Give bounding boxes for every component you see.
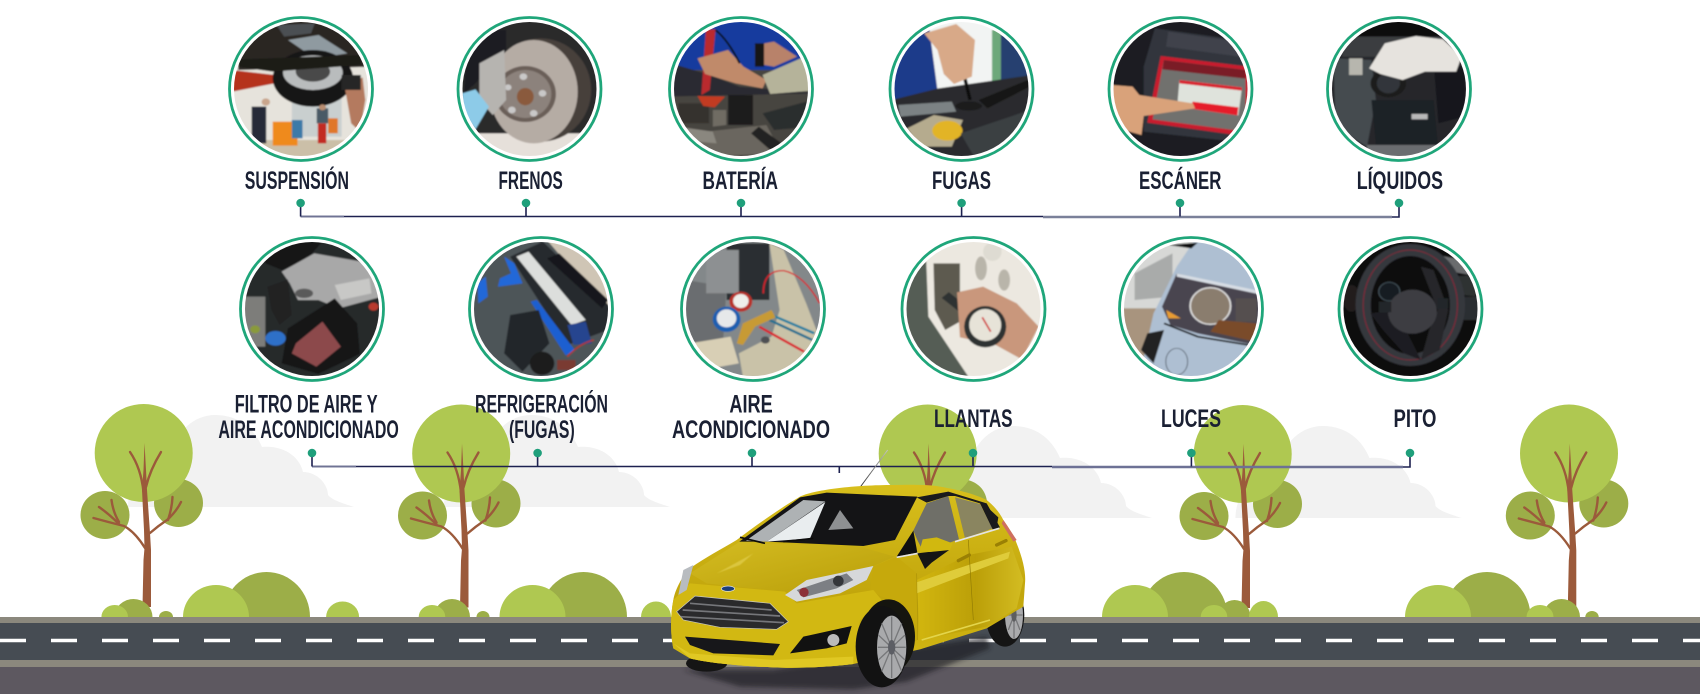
- photo: AC gauges: [686, 242, 820, 376]
- ring: [1339, 238, 1482, 380]
- left headlight: [678, 565, 693, 595]
- photo: dipstick: [894, 22, 1028, 156]
- item: escaner: [1108, 13, 1255, 207]
- ford badge: [721, 586, 735, 591]
- ring: [682, 238, 824, 380]
- photo: steering wheel: [1344, 242, 1478, 376]
- label: FUGAS: [932, 167, 991, 195]
- marker: [969, 449, 977, 457]
- item: pito: [1337, 233, 1488, 457]
- marker: [1395, 199, 1403, 207]
- hood: [690, 542, 895, 592]
- label: LUCES: [1161, 405, 1221, 433]
- item: aire acondicionado: [672, 233, 830, 457]
- label: FILTRO DE AIRE Y: [235, 390, 378, 418]
- photo: headlight: [1124, 242, 1258, 376]
- label: PITO: [1394, 405, 1436, 433]
- item: llantas: [899, 233, 1050, 457]
- ring: [1120, 238, 1262, 380]
- label: SUSPENSIÓN: [245, 165, 349, 195]
- label line 2: ACONDICIONADO: [672, 416, 830, 444]
- grille: [677, 596, 788, 629]
- near-side tyre: [686, 655, 727, 672]
- bumper: [671, 583, 882, 668]
- photo: fluid refill: [1332, 22, 1466, 156]
- photo: tire gauge: [906, 242, 1040, 376]
- marker: [1406, 449, 1414, 457]
- label: FRENOS: [498, 167, 563, 195]
- road: [0, 617, 1700, 694]
- connector line: top row: [301, 203, 1399, 217]
- photo: suspension lift: [234, 22, 368, 156]
- connector line: bottom row: [312, 453, 1410, 473]
- item: frenos: [453, 13, 606, 207]
- marker: [1187, 449, 1196, 457]
- photo: air filter: [245, 242, 379, 376]
- marker: [296, 199, 305, 207]
- marker: [533, 449, 542, 457]
- photo: scanner tablet: [1114, 22, 1248, 156]
- right headlight: [785, 566, 873, 602]
- body: [671, 485, 1025, 668]
- item: fugas: [889, 13, 1037, 207]
- tail light: [1002, 520, 1017, 542]
- wheel arch: [862, 599, 915, 674]
- ring: [670, 18, 812, 160]
- ring: [1109, 18, 1252, 160]
- label line 2: AIRE ACONDICIONADO: [218, 416, 399, 444]
- fender: [870, 557, 917, 647]
- marker: [1176, 199, 1184, 207]
- photo: brake disc: [462, 22, 596, 156]
- marker: [737, 199, 745, 207]
- car: [671, 450, 1025, 689]
- ring: [890, 18, 1033, 160]
- ring: [230, 18, 372, 160]
- label: LLANTAS: [934, 405, 1013, 433]
- car shadow: [683, 637, 990, 689]
- lower intake: [685, 637, 780, 655]
- label: LÍQUIDOS: [1357, 166, 1443, 195]
- windshield: [739, 493, 917, 546]
- ring: [458, 18, 601, 160]
- marker: [957, 199, 966, 207]
- label: ESCÁNER: [1139, 166, 1221, 195]
- marker: [308, 449, 316, 457]
- mirror: [917, 537, 953, 569]
- antenna: [857, 450, 888, 491]
- fog lamp: [790, 626, 852, 653]
- item: suspension: [223, 13, 380, 207]
- ring: [240, 238, 384, 380]
- marker: [522, 199, 530, 207]
- label: REFRIGERACIÓN: [475, 388, 608, 418]
- label: BATERÍA: [702, 166, 778, 195]
- item: liquidos: [1327, 13, 1474, 207]
- ring: [470, 238, 612, 380]
- door handles: [958, 541, 1006, 561]
- side windows: [897, 492, 1000, 557]
- item: refrigeracion: [465, 233, 616, 457]
- photo: battery test: [674, 22, 808, 156]
- item: luces: [1118, 233, 1265, 457]
- trees: [80, 404, 1628, 608]
- photo: radiator hoses: [474, 242, 608, 376]
- ring: [902, 238, 1045, 380]
- marker: [748, 449, 756, 457]
- label line 2: (FUGAS): [509, 416, 575, 444]
- label: AIRE: [729, 390, 773, 418]
- front wheel: [856, 606, 908, 687]
- item: bateria: [667, 13, 820, 207]
- rear wheel: [986, 583, 1024, 647]
- background clouds: [128, 415, 1462, 518]
- bushes: [101, 572, 1599, 662]
- item: filtro de aire: [218, 233, 399, 457]
- ring: [1328, 18, 1470, 160]
- door panels: [917, 547, 1023, 640]
